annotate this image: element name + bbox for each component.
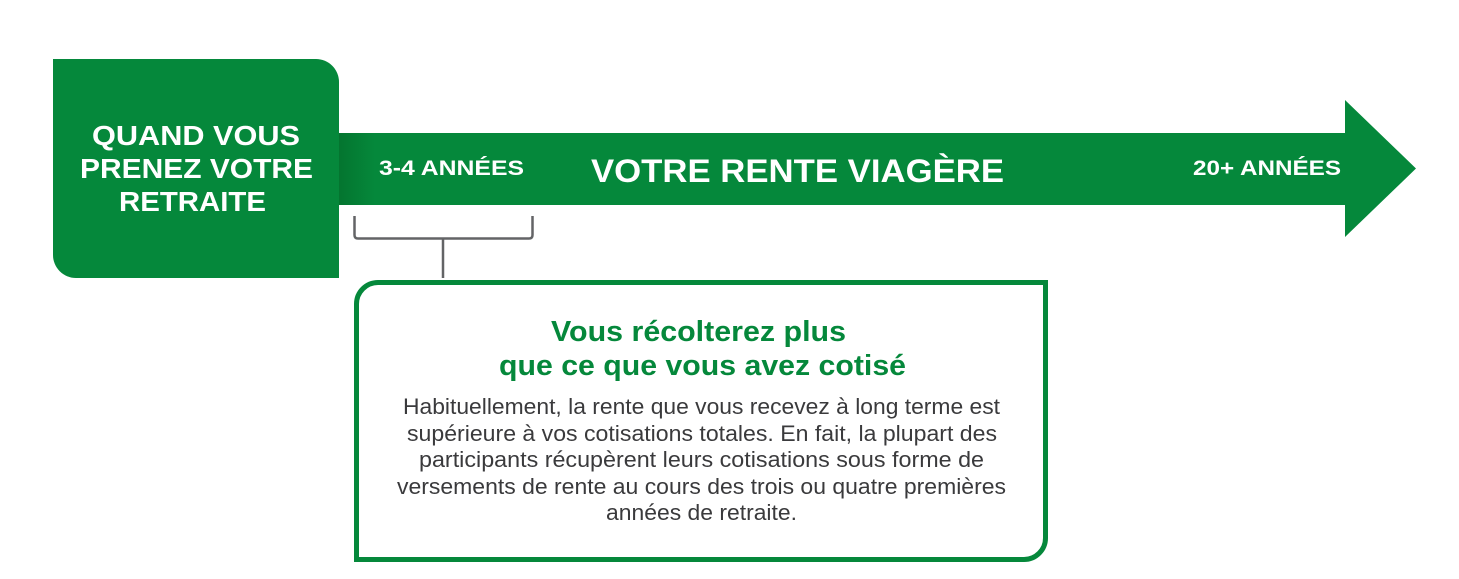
label: 3-4 années: 3-4 ANNÉES [379,157,524,180]
callout body text: années de retraite. [606,500,797,525]
retirement start text: PRENEZ VOTRE [80,153,313,184]
callout body text: supérieure à vos cotisations totales. En fait, la plupart des [407,421,997,446]
retirement start text: QUAND VOUS [92,120,300,151]
callout body text: participants récupèrent leurs cotisations sous forme de [419,447,984,472]
callout body text [397,394,1006,525]
label: 20+ années: 20+ ANNÉES [1193,157,1341,180]
panel: retirement start [53,59,339,278]
retirement start text [80,120,313,217]
callout heading [499,316,906,382]
timeline arrow [339,100,1416,237]
callout panel [356,282,1046,562]
callout heading: Vous récolterez plus [551,316,846,348]
callout body text: Habituellement, la rente que vous recevez à long terme est [403,394,1000,419]
callout heading: que ce que vous avez cotisé [499,350,906,382]
arrow title: VOTRE RENTE VIAGÈRE [591,153,1004,189]
retirement start text: RETRAITE [119,186,266,217]
callout body text: versements de rente au cours des trois ou quatre premières [397,474,1006,499]
bracket connector [354,216,532,278]
